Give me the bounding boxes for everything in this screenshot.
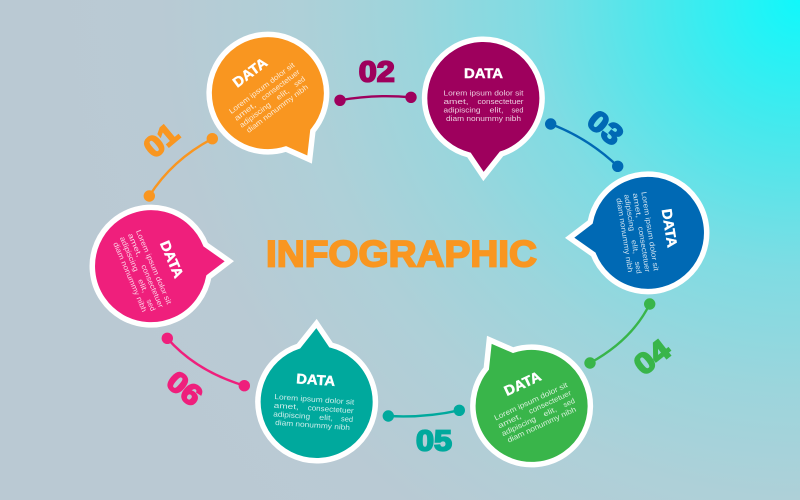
panel: step 2 magenta bubble: sed	[512, 106, 524, 115]
panel: step 3 blue bubble	[566, 171, 710, 296]
panel: step 2 magenta bubble: adipiscing	[444, 106, 480, 115]
panel: step 6 pink bubble: adipiscing	[118, 235, 141, 273]
panel: step 6 pink bubble: elit,	[136, 278, 150, 294]
number 06: 06	[160, 365, 208, 413]
panel: step 5 teal bubble: consectetuer	[307, 403, 355, 415]
panel: step 5 teal bubble: adipiscing	[273, 409, 310, 421]
panel: step 2 magenta bubble: consectetuer	[478, 97, 524, 106]
panel: step 1 orange bubble: Lorem ipsum dolor sit	[227, 60, 296, 116]
number 03: 03	[581, 105, 629, 152]
panel: step 5 teal bubble: diam nonummy nibh	[275, 418, 350, 432]
panel: step 6 pink bubble	[89, 203, 233, 328]
panel: step 1 orange bubble: elit,	[274, 86, 291, 102]
panel: step 2 magenta bubble: elit,	[490, 106, 504, 115]
number 01: 01	[138, 118, 185, 165]
panel: step 1 orange bubble	[187, 12, 359, 191]
panel: step 4 green bubble: consectetuer	[527, 388, 573, 416]
connector 05	[383, 405, 465, 422]
panel: step 4 green bubble: amet,	[496, 411, 523, 430]
connector 04	[584, 298, 655, 369]
connector 06	[162, 333, 250, 391]
panel: step 5 teal bubble: sed	[341, 414, 353, 424]
connector 02	[334, 92, 417, 106]
panel: step 5 teal bubble: amet,	[274, 401, 299, 411]
number 04: 04	[628, 334, 677, 382]
panel: step 6 pink bubble: amet,	[126, 232, 144, 258]
panel: step 3 blue bubble: adipiscing	[622, 194, 637, 232]
number 05: 05	[416, 426, 452, 458]
panel: step 4 green bubble: Lorem ipsum dolor sit	[493, 380, 569, 422]
panel: step 2 magenta bubble: diam nonummy nibh	[446, 114, 521, 123]
panel: step 6 pink bubble: DATA	[157, 238, 187, 280]
panel: step 3 blue bubble: sed	[633, 261, 644, 274]
panel: step 3 blue bubble: Lorem ipsum dolor sit	[639, 191, 661, 271]
panel: step 5 teal bubble: elit,	[319, 413, 333, 423]
panel: step 6 pink bubble: diam nonummy nibh	[111, 241, 149, 313]
panel: step 6 pink bubble: Lorem ipsum dolor sit	[134, 228, 174, 306]
panel: step 2 magenta bubble: Lorem ipsum dolor sit	[444, 88, 524, 97]
panel: step 3 blue bubble: amet,	[631, 192, 644, 218]
panel: step 6 pink bubble: consectetuer	[139, 263, 166, 309]
panel: step 2 magenta bubble	[425, 39, 542, 176]
connector 01	[144, 133, 218, 202]
number 02: 02	[359, 56, 395, 88]
panel: step 1 orange bubble: amet,	[232, 100, 258, 123]
panel: step 4 green bubble	[440, 308, 613, 487]
panel: step 5 teal bubble: DATA	[296, 370, 336, 389]
panel: step 1 orange bubble: sed	[292, 74, 307, 89]
panel: step 3 blue bubble: DATA	[659, 208, 681, 249]
panel: step 1 orange bubble: consectetuer	[260, 67, 302, 102]
panel: step 1 orange bubble: DATA	[229, 54, 270, 90]
panel: step 4 green bubble: DATA	[501, 368, 543, 399]
panel: step 4 green bubble: sed	[562, 396, 576, 409]
panel: step 3 blue bubble: consectetuer	[636, 226, 652, 273]
panel: step 1 orange bubble: diam nonummy nibh	[245, 82, 310, 135]
panel: step 4 green bubble: diam nonummy nibh	[506, 405, 578, 445]
connector 03	[545, 118, 623, 172]
panel: step 4 green bubble: elit,	[542, 405, 558, 419]
panel: step 1 orange bubble: adipiscing	[238, 100, 273, 130]
panel: step 2 magenta bubble: DATA	[464, 65, 503, 81]
panel: step 5 teal bubble: Lorem ipsum dolor sit	[274, 392, 355, 407]
panel: step 3 blue bubble: elit,	[629, 239, 641, 254]
panel: step 3 blue bubble: diam nonummy nibh	[614, 197, 635, 273]
panel: step 4 green bubble: adipiscing	[500, 414, 537, 438]
panel: step 5 teal bubble	[258, 324, 375, 461]
panel: step 6 pink bubble: sed	[145, 298, 158, 312]
panel: step 2 magenta bubble: amet,	[444, 97, 468, 106]
title: INFOGRAPHIC	[266, 233, 537, 275]
